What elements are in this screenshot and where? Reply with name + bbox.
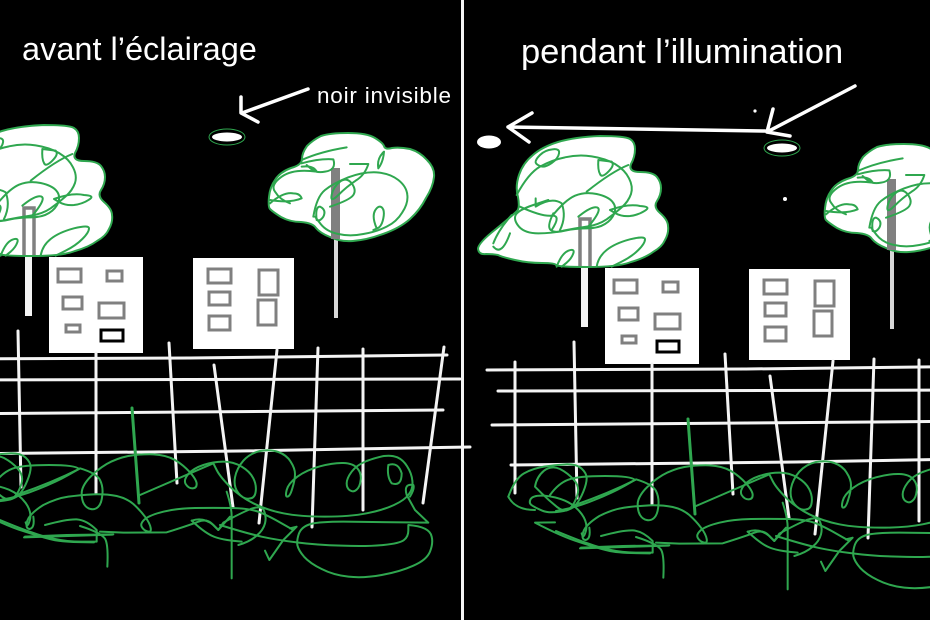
label: noir invisible: noir invisible xyxy=(317,83,451,108)
divider xyxy=(461,0,464,620)
heading: pendant l'illumination: pendant l’illumination xyxy=(521,33,843,71)
building: left xyxy=(49,257,143,353)
tree: right xyxy=(269,133,434,318)
panel: avant l'éclairage xyxy=(0,31,470,578)
dot: lower xyxy=(783,197,787,201)
icon: displaced white ellipse xyxy=(477,136,501,148)
panel: pendant l'illumination xyxy=(477,33,930,589)
heading: avant l'éclairage: avant l’éclairage xyxy=(22,31,257,67)
tree: left xyxy=(0,125,112,316)
building: right xyxy=(193,258,294,349)
building: left xyxy=(605,268,699,364)
arrow: long horizontal xyxy=(508,113,765,142)
building: right xyxy=(749,269,850,360)
fence xyxy=(0,331,470,527)
icon: object in the sky xyxy=(764,140,800,156)
arrow: to object xyxy=(241,89,308,122)
dot: upper xyxy=(753,109,757,113)
tree: right xyxy=(825,144,930,329)
icon: object in the sky xyxy=(209,129,245,145)
fence xyxy=(487,342,930,538)
grass scribble xyxy=(508,419,930,589)
tree: left xyxy=(478,136,668,327)
arrow: incoming diagonal xyxy=(767,86,855,136)
grass scribble xyxy=(0,408,432,578)
